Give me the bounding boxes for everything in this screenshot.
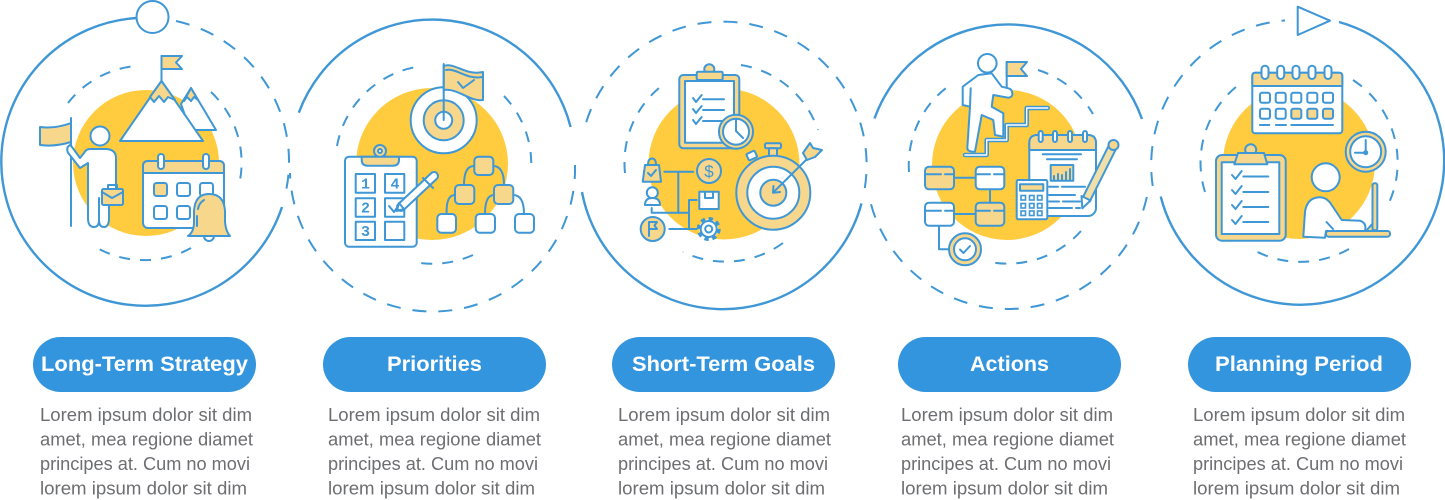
- icon: clipboard with numbered grid: [345, 145, 417, 247]
- icon: calculator: [1017, 180, 1047, 219]
- ring: step 2: [290, 20, 575, 312]
- icon: clipboard checklist with clock: [679, 64, 753, 149]
- pill heading: Planning Period: [1188, 337, 1411, 392]
- ring: step 5: [1151, 7, 1444, 305]
- icon: bell: [188, 194, 230, 241]
- text block: Planning Period description: Lorem ipsum dolor sit dim: [1193, 404, 1405, 425]
- panel: actions: [870, 24, 1147, 309]
- yellow disc: [648, 88, 800, 240]
- text block: Actions description: lorem ipsum dolor sit dim: [901, 478, 1108, 498]
- text block: Short-Term Goals description: [618, 404, 831, 498]
- text block: Priorities description: [328, 404, 541, 498]
- icon: pencil: [1082, 140, 1118, 208]
- icon: hierarchy chart: [437, 157, 534, 233]
- icon: calendar: [1252, 66, 1342, 133]
- icon: clipboard with numbered grid: 3: [361, 224, 370, 241]
- text block: Short-Term Goals description: principes at. Cum no movi: [618, 453, 828, 474]
- panel: short-term goals: [582, 22, 867, 309]
- pill heading: Short-Term Goals: Short-Term Goals: [632, 353, 815, 376]
- text block: Actions description: [901, 404, 1114, 498]
- ring: step 1: [1, 1, 289, 306]
- pill heading: Short-Term Goals: [612, 337, 835, 392]
- yellow disc: [73, 90, 219, 236]
- text block: Actions description: Lorem ipsum dolor sit dim: [901, 404, 1113, 425]
- icon: business network diagram: $: [704, 162, 714, 181]
- icon: flowchart with check badge: [925, 167, 1004, 265]
- icon: report document with chart: [1029, 131, 1096, 216]
- text block: Planning Period description: lorem ipsum dolor sit dim: [1193, 478, 1400, 498]
- text block: Long-Term Strategy description: principes at. Cum no movi: [40, 453, 250, 474]
- text block: Short-Term Goals description: lorem ipsum dolor sit dim: [618, 478, 825, 498]
- text block: Short-Term Goals description: Lorem ipsum dolor sit dim: [618, 404, 830, 425]
- icon: person with flag and briefcase: [40, 118, 123, 227]
- icon: stairs: [965, 108, 1048, 155]
- text block: Short-Term Goals description: amet, mea regione diamet: [618, 428, 831, 450]
- text block: Planning Period description: principes at. Cum no movi: [1193, 453, 1403, 474]
- yellow disc: [1223, 87, 1375, 239]
- pill heading: Actions: Actions: [970, 353, 1049, 376]
- text block: Long-Term Strategy description: amet, mea regione diamet: [40, 428, 253, 450]
- text block: Long-Term Strategy description: Lorem ipsum dolor sit dim: [40, 404, 252, 425]
- icon: clipboard with numbered grid: 2: [361, 200, 370, 218]
- text block: Planning Period description: amet, mea regione diamet: [1193, 428, 1406, 450]
- text block: Priorities description: amet, mea regione diamet: [328, 428, 541, 450]
- icon: clipboard checklist: [1216, 144, 1286, 241]
- text block: Priorities description: principes at. Cum no movi: [328, 453, 538, 474]
- pill heading: Priorities: Priorities: [387, 353, 482, 376]
- text block: Long-Term Strategy description: [40, 404, 253, 498]
- panel: long-term strategy: [1, 1, 289, 306]
- pill heading: Planning Period: Planning Period: [1215, 353, 1383, 376]
- text block: Priorities description: lorem ipsum dolor sit dim: [328, 478, 535, 498]
- panel: planning period: [1151, 7, 1444, 305]
- icon: wall clock: [1346, 132, 1386, 172]
- text block: Priorities description: Lorem ipsum dolor sit dim: [328, 404, 540, 425]
- icon: person at laptop: [1303, 163, 1390, 238]
- text block: Actions description: principes at. Cum no movi: [901, 453, 1111, 474]
- text block: Long-Term Strategy description: lorem ipsum dolor sit dim: [40, 478, 247, 498]
- text block: Actions description: amet, mea regione diamet: [901, 428, 1114, 450]
- icon: climbing person with flag: [963, 54, 1027, 152]
- icon: pen: [397, 176, 434, 211]
- panel: priorities: [290, 20, 575, 312]
- text block: Planning Period description: [1193, 404, 1406, 498]
- icon: clipboard with numbered grid: 4: [390, 176, 400, 194]
- pill heading: Long-Term Strategy: [33, 337, 256, 392]
- pill heading: Priorities: [323, 337, 546, 392]
- icon: calendar: [143, 154, 224, 228]
- ring: step 3: [582, 22, 867, 309]
- yellow disc: [932, 90, 1082, 240]
- yellow disc: [356, 88, 508, 240]
- ring: step 4: [870, 24, 1147, 309]
- icon: clipboard with numbered grid: 1: [361, 176, 370, 194]
- pill heading: Actions: [898, 337, 1121, 392]
- icon: target with flag: [411, 64, 483, 153]
- pill heading: Long-Term Strategy: Long-Term Strategy: [41, 353, 248, 376]
- icon: stopwatch target with arrow: [736, 143, 822, 230]
- icon: mountains with flag: [120, 56, 216, 141]
- icon: business network diagram: [641, 158, 721, 241]
